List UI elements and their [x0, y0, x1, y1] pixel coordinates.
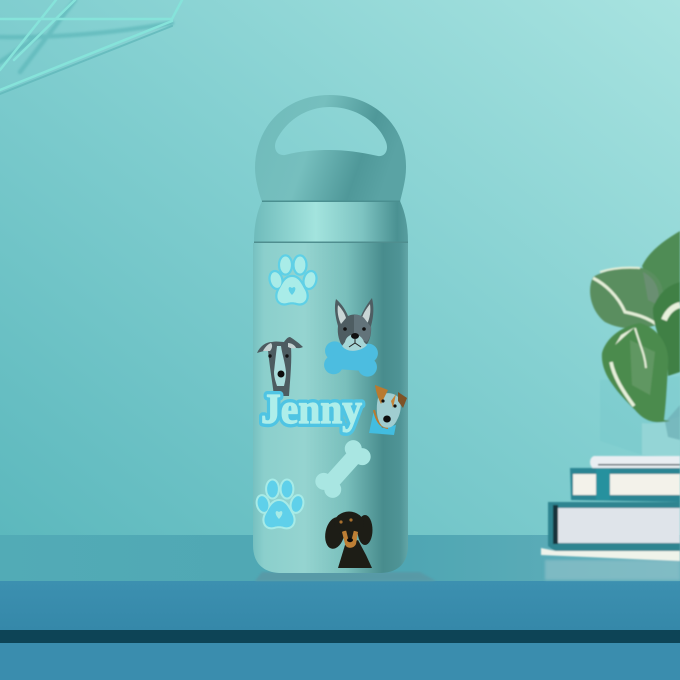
paw sticker top: [269, 256, 317, 303]
sticker: greyhound: [257, 337, 303, 396]
handle and cap: [255, 95, 406, 202]
sticker: dachshund: [322, 512, 372, 568]
table front: [0, 581, 680, 630]
table: [0, 535, 680, 680]
book reflection: [545, 560, 680, 580]
bottle: [253, 95, 408, 573]
pot: [600, 376, 680, 458]
sticker: Jenny name: Jenny: [261, 387, 362, 433]
bottle shadow: [255, 572, 436, 581]
leaf: upper right: [642, 231, 680, 300]
leaf: right: [653, 282, 680, 376]
leaf: lower: [602, 323, 670, 422]
lower drawer front: [0, 643, 680, 680]
wall background: [0, 0, 680, 536]
sticker: pale bone: [312, 437, 374, 501]
lower book: [548, 502, 680, 552]
leaf: left: [590, 268, 663, 328]
table top surface: [0, 535, 680, 581]
wire wall grid: [0, 0, 182, 94]
table shadow gap: [0, 630, 680, 643]
books: [541, 456, 680, 580]
plant: [590, 231, 680, 458]
bottle body: [253, 243, 408, 573]
sticker: french bulldog: [323, 298, 379, 377]
white base sheet: [541, 548, 680, 561]
sticker: blue bone: [323, 341, 379, 377]
sticker: Jenny name: Jenny: [261, 387, 362, 433]
upper book: [570, 468, 680, 502]
sticker: terrier dog: [369, 385, 407, 435]
lid collar: [254, 201, 408, 242]
paper on top: [590, 456, 680, 469]
paw sticker bottom: [256, 480, 304, 527]
